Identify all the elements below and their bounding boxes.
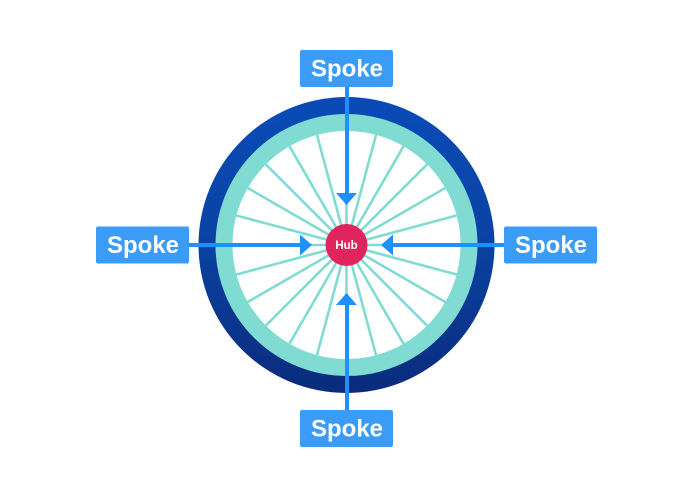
label: left spoke xyxy=(96,226,189,264)
label: top spoke: Spoke xyxy=(311,56,383,82)
arrow: left spoke to hub xyxy=(188,234,312,256)
hub xyxy=(326,224,368,266)
label: right spoke: Spoke xyxy=(515,232,587,259)
label: bottom spoke xyxy=(300,410,393,447)
label: left spoke: Spoke xyxy=(107,232,179,259)
wheel spokes xyxy=(232,131,460,359)
label: top spoke xyxy=(300,50,393,87)
hub: Hub xyxy=(335,240,358,252)
label: bottom spoke: Spoke xyxy=(311,416,383,442)
rim xyxy=(224,122,469,368)
tyre xyxy=(198,97,494,393)
arrow: bottom spoke to hub xyxy=(336,293,357,412)
arrow: top spoke to hub xyxy=(336,86,357,205)
label: right spoke xyxy=(504,226,597,264)
arrow: right spoke to hub xyxy=(381,234,506,256)
